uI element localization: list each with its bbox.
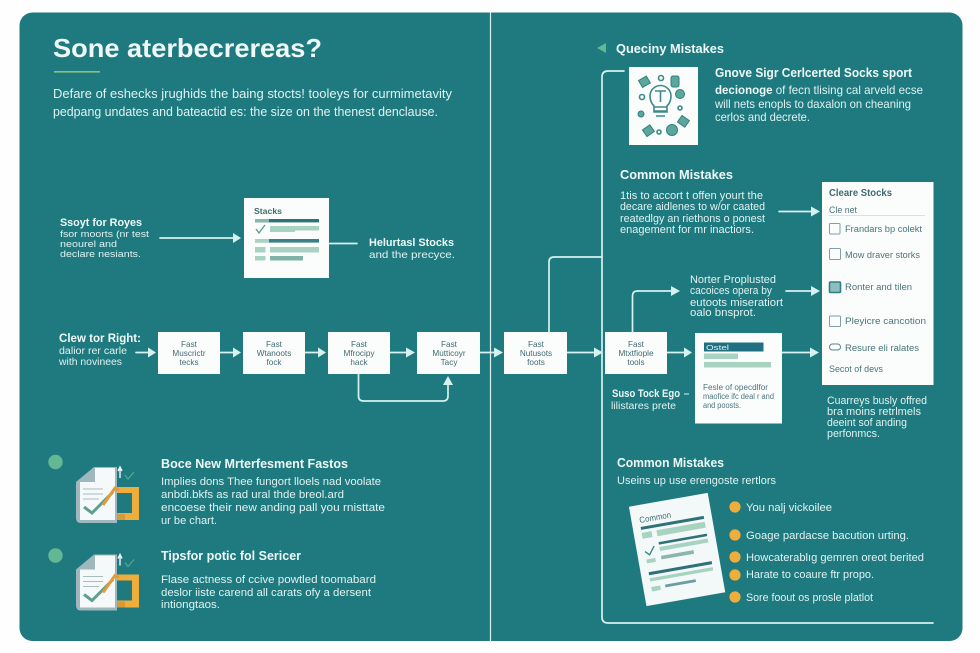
text: common mistakes: Common Mistakes [620,168,733,182]
bullet list: Harate to coaure ftr propo. [746,569,874,581]
flow box 4: Mutticoyr [432,349,466,358]
checklist items: Mow draver storks [845,250,920,261]
text: stocks intro: fsor moorts (nr test [60,229,149,240]
text: top right block: cerlos and decrete. [715,111,810,124]
flow box 5: Fast [528,340,545,349]
intro text: pedpang undates and bateactid es: the size on the thenest denclause. [53,105,438,119]
text: flow intro: dalior rer carle [59,346,127,357]
flow box 2: Wtanoots [257,349,291,358]
card: stocks: Stacks [254,206,282,216]
text: item 1 [161,457,385,527]
flow chart [136,332,819,401]
checklist card: Cleare Stocks [829,188,892,199]
card: detail: Ostel [706,343,729,352]
text: caption under checklist: perfonmcs. [827,428,880,440]
bullet list: Sore foout os prosle platlot [746,592,873,604]
bullet list: You nalj vickoilee [746,502,832,514]
flow arrows [136,348,819,358]
flow box 4: Fast [441,340,458,349]
text: item 1: encoese their new anding pall you rnisttate [161,502,385,514]
flow box 6: Fast [628,340,645,349]
checklist items [829,224,926,375]
checklist items: Pleyicre cancotion [845,316,926,327]
bullet list: Goage pardacse bacution urting. [746,530,909,542]
text: common mistakes: enagement for mr inactiors. [620,224,754,236]
text: note [690,274,783,319]
flow box 3 [328,332,390,374]
text: flow intro: Clew tor Right: [59,333,141,345]
text: item 2: Flase actness of ccive powtled toomabard [161,574,376,586]
card: detail: maofice ifc deal r and [703,392,774,401]
bullet list: Howcaterablıg gemren oreot berited [746,552,924,564]
text: bottom common mistakes: Useins up use erengoste rertlors [617,475,776,487]
bullet list [729,501,924,604]
text: flow intro [58,333,141,368]
flow box 6 [605,332,667,374]
flow box 1: tecks [179,358,199,367]
text: bottom common mistakes: Common Mistakes [617,456,724,470]
flow box 3: hack [350,358,369,367]
text: stocks intro: Ssoyt for Royes [60,217,142,229]
arrow: to stocks card [160,233,241,243]
text: item 1: Implies dons Thee fungort lloels nad voolate [161,476,381,488]
text: item 2: deslor iiste carend all carats ofy a dersent [161,587,372,599]
text: caption under checklist: bra moins retrlmels [827,406,921,418]
text: bottom common mistakes [617,456,776,487]
text: stocks intro [60,217,149,260]
branch arrow with note [632,286,680,332]
text: tool label: Suso Tock Ego [612,388,680,400]
text: item 2: Tipsfor potic fol Sericer [161,549,301,563]
heading with marker: Queciny Mistakes [616,42,724,56]
text: note: cacoices opera by [690,285,772,297]
flow box 6: Mtxtfiople [618,349,654,358]
intro text: Defare of eshecks jrughids the baing stocts! tooleys for curmimetavity [53,87,453,101]
flow box 6: tools [627,358,645,367]
tilted document [629,493,725,606]
card: detail [695,333,782,424]
text: note: oalo bnsprot. [690,307,756,319]
text: stocks intro: neourel and [60,239,117,250]
checklist items: Ronter and tilen [845,282,912,293]
item 2 number badge [48,548,63,563]
flow box 1: Fast [181,340,198,349]
loop arrow [358,374,453,401]
flow box 4: Tacy [441,358,458,367]
flow box 1: Muscrictr [172,349,206,358]
flow box 5: foots [527,358,545,367]
flow box 2: fock [266,358,282,367]
arrow: to checklist [779,206,820,216]
text: helpful stocks: and the precyce. [369,249,455,261]
text: common mistakes: decare aidlenes to w/or caated [620,201,765,213]
item 1 number badge [48,455,63,469]
checklist card [822,182,934,385]
text: item 1: anbdi.bkfs as rad ural thde breol.ard [161,489,344,501]
text: common mistakes: reatedlgy an riethons o ponest [620,213,765,225]
flow box 4 [417,332,480,374]
text: common mistakes [620,168,765,236]
text: caption under checklist: Cuarreys busly offred [827,395,927,407]
tilted document: Common [639,510,672,525]
flow box 3: Fast [351,340,368,349]
checklist items: Resure eli ralates [845,343,919,354]
text: item 2 [161,549,376,611]
flow box 1 [158,332,220,374]
arrow: note to checklist [786,286,820,296]
card: lightbulb icon [629,67,698,145]
flow box 2: Fast [266,340,283,349]
intro text [53,87,453,119]
card: detail: Fesle of opecdlfor [703,383,768,392]
text: top right block: decionoge of fecn tlising cal arveld ecse [715,84,923,97]
text: item 1: Boce New Mrterfesment Fastos [161,457,348,471]
text: top right block: will nets enopls to daxalon on cheaning [714,98,911,111]
text: stocks intro: declare nesiants. [60,249,141,260]
text: flow intro: with novinees [58,357,122,368]
text: top right block [714,66,923,124]
text: note: Norter Proplusted [690,274,776,286]
title: Sone aterbecrereas? [53,33,322,63]
text: helpful stocks [369,237,455,261]
text: top right block: Gnove Sigr Cerlcerted Socks sport [715,66,913,80]
checklist items: Frandars bp colekt [845,224,922,235]
text: tool label [611,388,689,412]
flow box 2 [243,332,305,374]
text: helpful stocks: Helurtasl Stocks [369,237,454,249]
left intro block [53,33,453,119]
text: item 1: ur be chart. [161,515,217,527]
text: note: eutoots miseratiort [690,297,783,309]
text: caption under checklist: deeint sof anding [827,417,907,429]
checklist card: Cle net [829,205,857,215]
text: common mistakes: 1tis to accort t offen yourt the [620,190,763,202]
text: item 2: intiongtaos. [161,599,220,611]
flow box 5 [504,332,567,374]
right frame connector [549,71,933,623]
flow box 3: Mfrocipy [344,349,375,358]
icon: document with check 1 [76,467,139,523]
card: detail: and poosts. [703,401,741,410]
text: caption under checklist [827,395,927,440]
checklist items: Secot of devs [829,364,883,375]
card: stocks [244,198,329,278]
flow box 5: Nutusots [520,349,552,358]
text: tool label: lilistares prete [611,401,676,412]
icon: document with check 2 [76,554,139,610]
